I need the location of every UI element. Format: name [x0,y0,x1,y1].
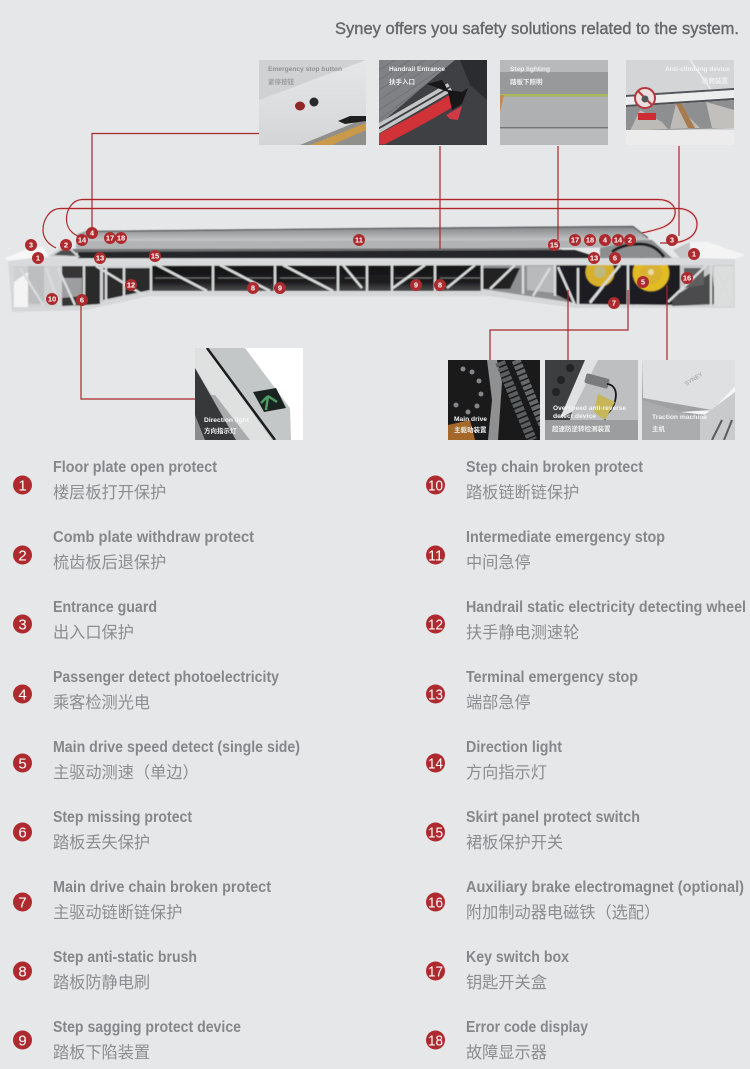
numbered markers on escalator: 4 [90,228,95,238]
numbered markers on escalator: 12 [127,280,135,290]
item 3: Entrance guard [53,599,157,616]
item 3: 出入口保护 [53,624,134,642]
numbered markers on escalator: 3 [670,236,674,244]
photo: handrail entrance: 扶手入口 [389,77,415,86]
item 14: 14 [428,756,443,772]
item 15 [426,809,640,852]
photo: step lighting: 踏板下照明 [510,77,543,86]
item 2: 2 [18,548,27,564]
numbered markers on escalator: 2 [628,236,632,244]
item 9: 踏板下陷装置 [53,1044,150,1062]
photo: anti-climbing device [626,60,734,130]
photo: direction light [195,348,303,440]
numbered markers on escalator: 15 [550,240,558,250]
photo: handrail entrance [376,60,487,145]
photo: overspeed anti-reverse detect device [545,360,638,440]
item 4: 乘客检测光电 [53,694,150,712]
item 1: 楼层板打开保护 [53,484,166,502]
numbered markers on escalator: 10 [48,294,56,304]
numbered markers on escalator: 8 [438,280,442,290]
item 18: Error code display [466,1019,588,1036]
item 1 [13,459,218,502]
yellow drive wheels [585,257,615,287]
item 11: Intermediate emergency stop [466,529,665,546]
item 11 [426,529,665,572]
item 17: 钥匙开关盒 [466,974,547,992]
item 15: 15 [428,824,443,842]
item 5: Main drive speed detect (single side) [53,739,300,756]
item 18: 18 [428,1032,443,1050]
item 9: 9 [18,1032,27,1050]
item 10 [426,459,644,502]
item 12 [426,599,746,642]
photo: anti-climbing device: Anti-climbing device [665,66,730,73]
item 16 [426,879,744,922]
photo: anti-climbing device: 防爬装置 [702,76,728,85]
numbered markers on escalator: 6 [613,254,617,262]
numbered markers on escalator: 14 [78,236,87,244]
item 10: Step chain broken protect [466,459,644,476]
item 12: 扶手静电测速轮 [466,624,579,642]
item 13 [426,669,638,712]
item 14: Direction light [466,739,563,756]
legend: left column [13,459,300,1062]
item 12: 12 [428,616,443,634]
photo: direction light: Direction light [204,417,250,424]
item 8: Step anti-static brush [53,949,197,966]
heading: Syney offers you safety solutions related to the system. [335,19,739,38]
numbered markers on escalator: 6 [80,296,84,304]
item 10: 踏板链断链保护 [466,484,579,502]
photo: emergency stop button: Emergency stop button [268,66,342,73]
item 7 [13,879,272,922]
photo: traction machine: 主机 [652,424,666,433]
numbered markers on escalator: 4 [603,236,608,244]
item 15: 裙板保护开关 [466,834,563,852]
item 15: Skirt panel protect switch [466,809,640,826]
item 13: 端部急停 [466,694,531,712]
item 3 [13,599,157,642]
item 6: Step missing protect [53,809,193,826]
item 2: Comb plate withdraw protect [53,529,255,546]
numbered markers on escalator: 17 [571,236,579,244]
numbered markers on escalator: 13 [96,254,104,262]
numbered markers on escalator: 7 [612,298,616,308]
item 17 [426,949,569,992]
photo: traction machine [642,360,735,440]
item 6: 6 [18,824,27,842]
photo: traction machine: SYNEY [684,372,704,388]
numbered markers on escalator: 1 [692,250,696,258]
escalator truss [5,242,745,312]
item 6 [13,809,193,852]
photo: step lighting [500,60,608,145]
item 9 [13,1019,241,1062]
item 14: 方向指示灯 [466,764,547,782]
item 4: Passenger detect photoelectricity [53,669,279,686]
item 17: Key switch box [466,949,569,966]
numbered markers on escalator: 8 [251,284,255,292]
numbered markers on escalator: 14 [614,236,623,244]
item 8: 8 [18,964,27,980]
numbered markers on escalator: 17 [106,234,114,242]
photo: overspeed anti-reverse detect device: Overspeed anti-reverse [553,405,626,412]
item 7: 主驱动链断链保护 [53,904,182,922]
item 1: Floor plate open protect [53,459,218,476]
item 14 [426,739,563,782]
item 7: Main drive chain broken protect [53,879,272,896]
item 1: 1 [18,478,27,494]
item 11: 11 [428,548,443,564]
item 5: 5 [18,756,27,772]
numbered markers on escalator [25,227,700,309]
item 16: 16 [428,894,443,912]
balustrade [48,226,672,258]
photo: traction machine: Traction machine [652,414,707,421]
item 6: 踏板丢失保护 [53,834,150,852]
numbered markers on escalator: 18 [586,236,594,244]
numbered markers on escalator: 2 [64,240,68,250]
item 4 [13,669,279,712]
item 11: 中间急停 [466,554,531,572]
numbered markers on escalator: 9 [278,284,282,292]
photo: main drive: 主驱动装置 [454,425,487,434]
item 2 [13,529,255,572]
numbered markers on escalator: 15 [151,252,159,260]
photo: emergency stop button [259,60,366,145]
photo: step lighting: Step lighting [510,66,550,73]
numbered markers on escalator: 18 [117,234,125,242]
photo: direction light: 方向指示灯 [204,426,237,435]
numbered markers on escalator: 1 [36,254,40,262]
photo: handrail entrance: Handrail Entrance [389,66,445,73]
item 10: 10 [428,478,443,494]
item 8 [13,949,197,992]
photo: overspeed anti-reverse detect device: detect device [553,413,596,420]
numbered markers on escalator: 3 [29,240,33,250]
item 3: 3 [18,616,27,634]
item 13: Terminal emergency stop [466,669,638,686]
item 18 [426,1019,588,1062]
numbered markers on escalator: 13 [590,254,598,262]
item 16: 附加制动器电磁铁（选配） [466,904,660,922]
photo: emergency stop button: 紧停按钮 [268,77,294,86]
item 8: 踏板防静电刷 [53,974,150,992]
item 17: 17 [428,964,443,980]
legend: right column [426,459,746,1062]
numbered markers on escalator: 9 [414,280,418,290]
item 2: 梳齿板后退保护 [53,554,166,572]
escalator diagram [5,134,745,399]
numbered markers on escalator: 5 [641,278,645,286]
numbered markers on escalator: 16 [683,274,691,282]
item 5: 主驱动测速（单边） [53,764,199,782]
item 13: 13 [428,686,443,704]
item 18: 故障显示器 [466,1044,547,1062]
red connector lines [60,200,697,243]
photo: overspeed anti-reverse detect device: 超速防逆转检测装置 [552,424,611,433]
numbered markers on escalator: 11 [355,236,363,244]
item 4: 4 [18,686,27,704]
photo: main drive [448,360,546,440]
item 5 [13,739,300,782]
photo: main drive: Main drive [454,416,487,423]
item 9: Step sagging protect device [53,1019,241,1036]
item 7: 7 [18,894,27,912]
